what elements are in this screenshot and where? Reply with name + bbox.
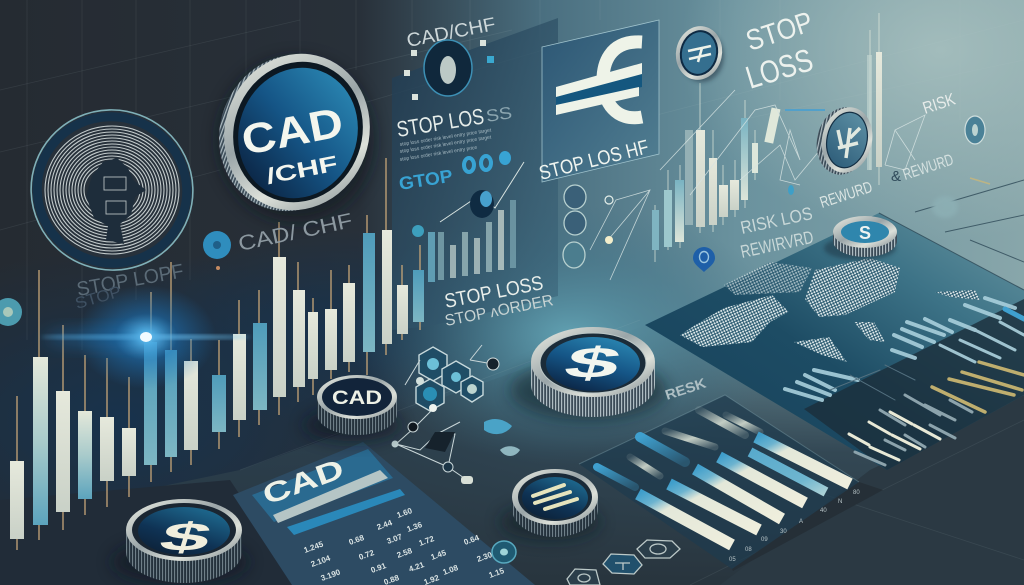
map bars bbox=[785, 298, 1015, 400]
center dark panel bbox=[392, 18, 558, 330]
table figures: 0.68 bbox=[348, 533, 366, 547]
table figures: 1.08 bbox=[442, 563, 460, 577]
table figures: 2.30 bbox=[476, 550, 494, 564]
icon: teal medallion bbox=[965, 116, 985, 144]
table figures: 2.44 bbox=[376, 518, 394, 532]
icon: blue pin right bbox=[693, 247, 715, 272]
table figures: 0.72 bbox=[358, 548, 376, 562]
center panel text: stop loss order risk level entry price bbox=[399, 145, 478, 163]
right candlestick chart bbox=[652, 13, 882, 262]
risk and reward labels: RISK LOS bbox=[739, 203, 814, 238]
stop loss order label: STOP LOSS bbox=[443, 272, 545, 313]
card title: CAD bbox=[258, 453, 348, 511]
stop loss heading: STOP bbox=[742, 6, 817, 58]
stop loss heading: LOSS bbox=[742, 41, 817, 96]
outlined blockchain coin bbox=[9, 87, 215, 293]
risk and reward labels bbox=[739, 89, 958, 262]
risk and reward labels: REWIRVRD bbox=[739, 227, 815, 262]
axis labels: 40 bbox=[820, 508, 827, 514]
table figures: 2.58 bbox=[396, 546, 414, 560]
center panel text: stop loss order risk level entry price target bbox=[399, 127, 492, 148]
axis labels: 09 bbox=[761, 537, 768, 543]
center panel text: STOP LOS bbox=[395, 103, 486, 142]
icon: teal disc bbox=[0, 298, 22, 326]
table figures: 1.245 bbox=[303, 539, 325, 555]
table figures: 1.36 bbox=[406, 520, 424, 534]
icon: teal dial bbox=[492, 541, 516, 563]
map panel bbox=[645, 213, 1024, 470]
teal dollar coin: S bbox=[859, 223, 871, 243]
table figures: 1.60 bbox=[396, 506, 414, 520]
front bars bbox=[638, 437, 850, 545]
center panel text: CAD/CHF bbox=[405, 14, 497, 52]
axis labels: 05 bbox=[729, 557, 736, 563]
table figures: 4.21 bbox=[408, 560, 426, 574]
center panel text: GTOP bbox=[397, 166, 454, 194]
big dollar coin: $ bbox=[559, 338, 627, 387]
upper right faint panel bbox=[879, 178, 1024, 290]
risk and reward labels: & bbox=[891, 168, 901, 185]
panel lists bbox=[830, 309, 1024, 465]
CAD coin: CAD bbox=[332, 388, 382, 409]
center panel text bbox=[395, 14, 513, 237]
main CAD/CHF coin: /CHF bbox=[264, 151, 340, 189]
risk and reward labels: REWURD bbox=[901, 152, 956, 184]
main CAD/CHF coin bbox=[197, 33, 392, 232]
center panel circle icons bbox=[563, 185, 613, 268]
stop loss heading bbox=[742, 6, 817, 96]
coin label: CAD bbox=[238, 98, 347, 164]
stop loss order label: STOP ᴧORDER bbox=[444, 292, 555, 330]
coin silhouette bbox=[86, 158, 146, 244]
icon: pin on chart bbox=[788, 185, 794, 195]
risk and reward labels: RISK bbox=[920, 89, 958, 118]
axis labels: 08 bbox=[745, 547, 752, 553]
CAD table card bbox=[233, 442, 535, 585]
axis labels: N bbox=[838, 499, 842, 505]
axis labels: 80 bbox=[853, 490, 860, 496]
teal dollar coin bbox=[824, 216, 897, 260]
table figures: 0.91 bbox=[370, 561, 388, 575]
dollar coin bottom left bbox=[112, 499, 248, 584]
network icon bbox=[404, 40, 494, 100]
table figures bbox=[303, 506, 506, 585]
CAD coin bbox=[304, 375, 400, 441]
dollar coin bottom left: $ bbox=[154, 515, 217, 559]
lens flare bbox=[41, 285, 251, 389]
left labels: STOP LOPF bbox=[75, 261, 185, 301]
left labels bbox=[0, 209, 355, 326]
stop loss order label bbox=[443, 272, 555, 330]
center panel text: SS bbox=[485, 103, 513, 126]
icon: blue pin bbox=[203, 231, 231, 270]
risk label: RESK bbox=[663, 375, 708, 403]
center panel text: stop loss order risk level entry price target bbox=[399, 134, 492, 155]
left labels: CAD/ CHF bbox=[236, 209, 355, 256]
axis labels bbox=[729, 490, 860, 563]
left labels: STOP bbox=[73, 284, 123, 313]
table figures: 3.190 bbox=[320, 567, 342, 583]
euro panel bbox=[537, 20, 659, 185]
medium coin: Y symbol bbox=[810, 102, 878, 180]
axis labels: 30 bbox=[780, 529, 787, 535]
table figures: 2.104 bbox=[310, 553, 332, 569]
big dollar coin bbox=[510, 327, 666, 420]
euro symbol bbox=[556, 42, 642, 118]
main candlestick chart bbox=[10, 158, 435, 550]
table figures: 3.07 bbox=[386, 532, 404, 546]
table figures: 1.45 bbox=[430, 548, 448, 562]
faded back bars bbox=[597, 410, 760, 487]
table figures: 0.64 bbox=[463, 533, 481, 547]
hexagon badges bbox=[567, 540, 680, 585]
euro panel caption: STOP LOS HF bbox=[537, 136, 651, 185]
table figures: 1.72 bbox=[418, 534, 436, 548]
faded chart behind center panel bbox=[438, 162, 524, 280]
risk and reward labels: REWURD bbox=[818, 179, 875, 212]
zigzag line chart bbox=[590, 90, 925, 280]
small coin: top bbox=[671, 22, 727, 84]
small bars coin bbox=[500, 469, 600, 540]
world map bbox=[680, 258, 980, 362]
molecule network bbox=[392, 345, 520, 484]
bar chart panel bbox=[579, 395, 883, 571]
table figures: 1.15 bbox=[488, 566, 506, 580]
axis labels: A bbox=[799, 519, 803, 525]
